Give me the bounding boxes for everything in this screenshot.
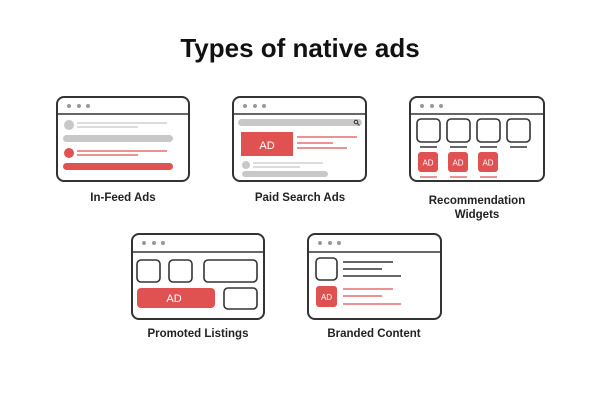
title: Types of native ads xyxy=(180,33,420,63)
panel: recommendation widgets: AD xyxy=(422,158,434,168)
panel: promoted listings xyxy=(132,234,264,319)
panel: recommendation widgets xyxy=(410,97,544,181)
panel: recommendation widgets: AD xyxy=(482,158,494,168)
label: promoted listings: Promoted Listings xyxy=(148,328,248,340)
label: recommendation widgets: Widgets xyxy=(455,209,499,221)
panel: in-feed ads xyxy=(57,97,189,181)
label: recommendation widgets: Recommendation xyxy=(429,195,525,207)
label: branded content: Branded Content xyxy=(327,328,421,340)
label: in-feed ads: In-Feed Ads xyxy=(90,192,156,204)
panel: branded content xyxy=(308,234,441,319)
panel: paid search ads: AD xyxy=(259,140,275,152)
panel: paid search ads xyxy=(233,97,366,181)
label: paid search ads: Paid Search Ads xyxy=(255,192,345,204)
panel: recommendation widgets: AD xyxy=(452,158,464,168)
panel: branded content: AD xyxy=(321,293,332,302)
panel: promoted listings: AD xyxy=(166,293,182,305)
